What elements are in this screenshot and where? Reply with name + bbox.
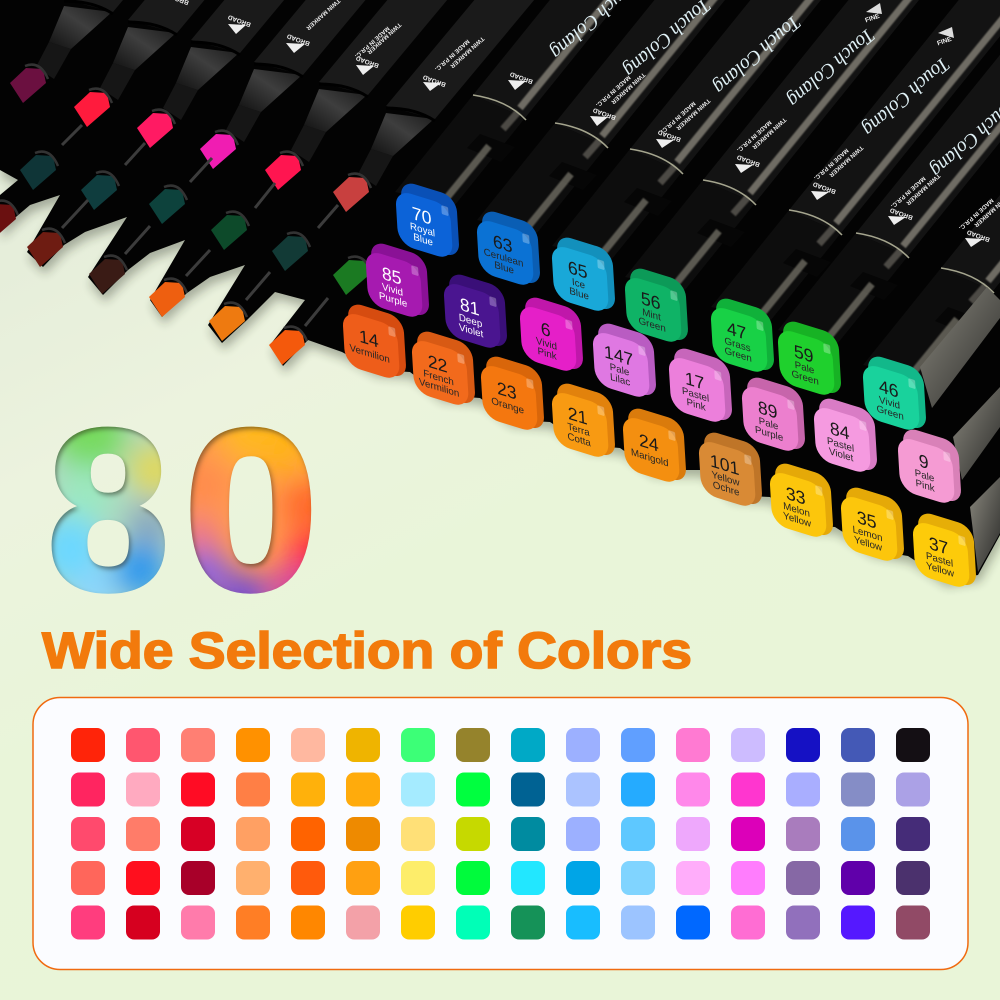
- cap: 35 Lemon Yellow: Lemon: [852, 524, 883, 544]
- upper marker: 2: [100, 0, 297, 100]
- cap: 84 Pastel Violet: Violet: [829, 446, 854, 465]
- heading: Wide Selection of Colors: [42, 622, 692, 679]
- cap: 37 Pastel Yellow: Pastel: [926, 551, 953, 570]
- cap: 56 Mint Green: [623, 263, 689, 348]
- cap: 65 Ice Blue: [550, 232, 616, 317]
- cap: 101 Yellow Ochre: Yellow: [711, 470, 740, 489]
- cap: 46 Vivid Green: Vivid: [879, 395, 900, 412]
- marker body: 59: [778, 0, 1000, 343]
- cap: 24 Marigold: 24: [638, 429, 659, 456]
- cap: 89 Pale Purple: 89: [757, 396, 778, 423]
- cap: 35 Lemon Yellow: 35: [856, 506, 877, 533]
- body labels: twin marker: TWIN MARKER: [904, 172, 941, 206]
- body labels: twin marker: MADE IN P.R.C.: [957, 197, 994, 231]
- cap: 23 Orange: [479, 351, 545, 436]
- cap: 65 Ice Blue: Blue: [569, 286, 590, 303]
- cap: 85 Vivid Purple: Vivid: [382, 282, 403, 299]
- cap: 9 Pale Pink: Pale: [914, 468, 935, 485]
- cap: 22 French Vermilion: 22: [427, 350, 448, 377]
- brand script labels: Touch Colang: [783, 24, 879, 111]
- body labels: twin marker: [594, 71, 1000, 231]
- cap: 9 Pale Pink: Pink: [915, 478, 936, 495]
- cap: 101 Yellow Ochre: [697, 427, 763, 512]
- cap: 21 Terra Cotta: Cotta: [567, 431, 592, 449]
- body labels: twin marker: MADE IN P.R.C.: [659, 100, 696, 134]
- upper marker: 5: [291, 0, 488, 162]
- marker body: 46: [863, 0, 1000, 378]
- cap: 35 Lemon Yellow: [839, 482, 905, 567]
- cap: 46 Vivid Green: [861, 351, 927, 436]
- marker tips: lower row: [0, 201, 307, 365]
- cap: 59 Pale Green: [776, 316, 842, 401]
- marker body: 56: [625, 0, 1000, 290]
- cap: 21 Terra Cotta: 21: [567, 402, 588, 429]
- body labels: broad tip icons: BROAD: [812, 180, 837, 195]
- marker set: black silhouette: [0, 0, 1000, 580]
- cap: 37 Pastel Yellow: 37: [928, 532, 949, 559]
- marker body: 47: [711, 0, 1000, 320]
- cap: 14 Vermilion: [341, 299, 407, 384]
- big number 80: 0: [183, 382, 319, 638]
- body labels: twin marker: TWIN MARKER: [750, 116, 787, 150]
- body labels: broad tip icons: [508, 70, 991, 247]
- upper marker: 3: [163, 0, 360, 120]
- cap: 89 Pale Purple: [740, 372, 806, 457]
- body labels: twin marker: TWIN MARKER: [609, 71, 646, 105]
- cap: 24 Marigold: [621, 403, 687, 488]
- cap: 56 Mint Green: Mint: [642, 307, 661, 324]
- cap: 33 Melon Yellow: 33: [785, 482, 806, 509]
- cap: 147 Pale Lilac: [591, 318, 657, 403]
- upper marker: 1: [36, 0, 233, 79]
- marker tips: middle row: [20, 152, 371, 295]
- body labels: twin marker: MADE IN P.R.C.: [889, 175, 926, 209]
- big number 80: [47, 382, 319, 638]
- cap: 17 Pastel Pink: Pink: [686, 397, 707, 414]
- cap: 81 Deep Violet: [442, 269, 508, 354]
- upper marker labels: BROAD: [355, 54, 380, 69]
- cap: 56 Mint Green: 56: [640, 287, 661, 314]
- brand script labels: Touch Colang: [709, 11, 805, 98]
- cap: 70 Royal Blue: 70: [411, 202, 432, 229]
- upper marker labels: MADE IN P.R.C.: [433, 38, 470, 72]
- cap: 63 Cerulean Blue: Cerulean: [483, 247, 524, 270]
- panel: color swatches: [33, 698, 968, 970]
- cap: 47 Grass Green: [709, 293, 775, 378]
- cap: 70 Royal Blue: Royal: [410, 221, 435, 240]
- body labels: twin marker: TWIN MARKER: [674, 97, 711, 131]
- cap: 33 Melon Yellow: [768, 458, 834, 543]
- body labels: twin marker: MADE IN P.R.C.: [594, 74, 631, 108]
- cap: 17 Pastel Pink: [667, 343, 733, 428]
- cap: 47 Grass Green: 47: [726, 317, 747, 344]
- cap: 84 Pastel Violet: Pastel: [827, 436, 854, 455]
- big number 80: 8: [47, 382, 169, 638]
- cap: 24 Marigold: Marigold: [631, 447, 669, 470]
- cap: 33 Melon Yellow: Melon: [783, 501, 810, 520]
- body labels: broad tip icons: BROAD: [736, 153, 761, 168]
- cap: 23 Orange: Orange: [491, 396, 525, 417]
- cap: 101 Yellow Ochre: Ochre: [712, 480, 740, 499]
- cap: 85 Vivid Purple: [364, 238, 430, 323]
- upper marker labels: BROAD: [422, 73, 447, 88]
- body labels: fine tip icons: FINE: [864, 13, 881, 24]
- body labels: fine tip icons: FINE: [936, 36, 953, 47]
- cap: 70 Royal Blue: [394, 178, 460, 263]
- cap: 35 Lemon Yellow: Yellow: [854, 535, 883, 554]
- cap: 101 Yellow Ochre: 101: [709, 450, 740, 479]
- cap: 89 Pale Purple: Purple: [755, 425, 784, 444]
- cap: 46 Vivid Green: 46: [878, 375, 899, 402]
- cap: 37 Pastel Yellow: Yellow: [926, 561, 955, 580]
- cap: 21 Terra Cotta: [550, 378, 616, 463]
- cap: 47 Grass Green: Grass: [724, 336, 751, 355]
- marker body: 65: [552, 0, 1000, 259]
- upper marker labels: MADE IN P.R.C.: [353, 25, 390, 59]
- cap: 6 Vivid Pink: [518, 292, 584, 377]
- body labels: twin marker: MADE IN P.R.C.: [735, 119, 772, 153]
- upper marker labels: TWIN MARKER: [448, 35, 485, 69]
- body labels: broad tip icons: BROAD: [889, 206, 914, 221]
- body labels: fine tip icons: [864, 3, 954, 47]
- cap: 63 Cerulean Blue: 63: [492, 230, 513, 257]
- cap: 63 Cerulean Blue: Blue: [494, 260, 515, 277]
- cap: 81 Deep Violet: Violet: [459, 322, 484, 341]
- cap: 6 Vivid Pink: Pink: [537, 346, 558, 363]
- cap: 17 Pastel Pink: 17: [684, 367, 705, 394]
- cap: 6 Vivid Pink: 6: [540, 318, 551, 341]
- marker tips: upper row: [10, 65, 371, 212]
- body labels: broad tip icons: BROAD: [657, 128, 682, 143]
- cap: 14 Vermilion: Vermilion: [349, 343, 390, 366]
- cap: 84 Pastel Violet: [812, 393, 878, 478]
- cap: 46 Vivid Green: Green: [876, 404, 904, 423]
- cap: 23 Orange: 23: [496, 377, 517, 404]
- upper marker: 6: [358, 0, 555, 186]
- cap: 22 French Vermilion: [410, 326, 476, 411]
- cap: 47 Grass Green: Green: [724, 346, 752, 365]
- swatch grid: [71, 728, 930, 940]
- cap: 59 Pale Green: 59: [793, 340, 814, 367]
- upper marker labels: BROAD: [286, 32, 311, 47]
- cap: 22 French Vermilion: French: [423, 368, 454, 388]
- cap: 147 Pale Lilac: Lilac: [610, 372, 631, 389]
- cap: 65 Ice Blue: Ice: [572, 277, 586, 292]
- cap: 59 Pale Green: Pale: [794, 360, 815, 377]
- side highlights: right markers: [920, 287, 1000, 572]
- marker neck highlights: [62, 125, 338, 326]
- cap: 65 Ice Blue: 65: [567, 256, 588, 283]
- cap: 17 Pastel Pink: Pastel: [682, 386, 709, 405]
- cap: 84 Pastel Violet: 84: [829, 417, 850, 444]
- brand script labels: [546, 0, 1000, 181]
- cap: 89 Pale Purple: Pale: [758, 416, 779, 433]
- cap: 63 Cerulean Blue: [475, 206, 541, 291]
- cap: 9 Pale Pink: 9: [918, 450, 929, 473]
- body labels: broad tip icons: BROAD: [509, 70, 534, 85]
- marker set shadow: [2, 7, 1000, 587]
- body labels: twin marker: TWIN MARKER: [827, 144, 864, 178]
- cap: 81 Deep Violet: Deep: [458, 312, 483, 330]
- cap: 85 Vivid Purple: Purple: [379, 291, 408, 310]
- cap: 147 Pale Lilac: Pale: [609, 362, 630, 379]
- cap: 14 Vermilion: 14: [358, 325, 379, 352]
- cap: 59 Pale Green: Green: [791, 369, 819, 388]
- cap: 70 Royal Blue: Blue: [413, 232, 434, 249]
- marker body: 70: [395, 0, 845, 205]
- upper marker: 4: [226, 0, 423, 142]
- cap: 22 French Vermilion: Vermilion: [419, 377, 460, 400]
- upper marker labels: TWIN MARKER: [365, 21, 402, 55]
- body labels: broad tip icons: BROAD: [966, 228, 991, 243]
- cap: 37 Pastel Yellow: [911, 508, 977, 593]
- cap: 9 Pale Pink: [896, 424, 962, 509]
- cap: 147 Pale Lilac: 147: [603, 341, 634, 370]
- brand script labels: Touch Colang: [858, 53, 954, 140]
- body labels: twin marker: MADE IN P.R.C.: [812, 147, 849, 181]
- cap: 85 Vivid Purple: 85: [381, 262, 402, 289]
- body labels: broad tip icons: BROAD: [592, 106, 617, 121]
- cap: 33 Melon Yellow: Yellow: [783, 511, 812, 530]
- marker body: 63: [477, 0, 927, 233]
- cap: 21 Terra Cotta: Terra: [567, 421, 590, 439]
- upper marker labels: [165, 0, 485, 91]
- cap: 56 Mint Green: Green: [638, 316, 666, 335]
- cap: 6 Vivid Pink: Vivid: [536, 336, 557, 353]
- cap: 81 Deep Violet: 81: [459, 293, 480, 320]
- upper marker labels: BROAD: [227, 13, 252, 28]
